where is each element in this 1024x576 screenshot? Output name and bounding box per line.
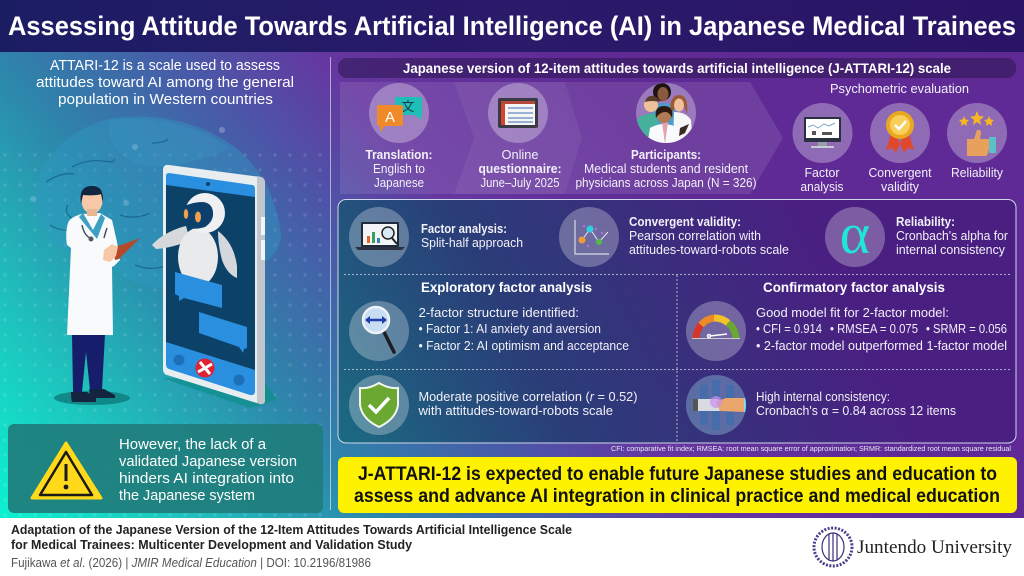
method: reliability xyxy=(825,201,1009,267)
step: factor analysis: analysis xyxy=(800,179,844,194)
footer xyxy=(0,518,1024,576)
method: convergent validity: Convergent validity: xyxy=(629,214,741,229)
heading pill: Japanese version of 12-item attitudes towards artificial intelligence (J-ATTARI-12) scale xyxy=(403,60,951,76)
intro text: population in Western countries xyxy=(58,91,273,108)
method: convergent validity xyxy=(559,207,789,267)
robot xyxy=(152,193,237,286)
method: convergent validity: Pearson correlation with xyxy=(629,228,761,243)
step: translation xyxy=(366,83,432,190)
heading: Exploratory factor analysis xyxy=(421,279,592,295)
warning text: However, the lack of a xyxy=(119,436,267,453)
citation: Fujikawa et al. (2026) | JMIR Medical Education | DOI: 10.2196/81986 xyxy=(11,555,371,570)
step: translation: Translation: xyxy=(366,147,432,162)
title band xyxy=(0,0,1024,52)
citation xyxy=(11,522,572,570)
chat bubbles xyxy=(175,272,247,353)
step: translation: Japanese xyxy=(374,175,424,190)
icon: medical team xyxy=(636,83,693,146)
step: convergent validity: validity xyxy=(881,179,919,194)
citation: for Medical Trainees: Multicenter Development and Validation Study xyxy=(11,537,413,552)
icon: warning triangle xyxy=(32,443,101,498)
step: questionnaire: questionnaire: xyxy=(478,161,562,176)
step: convergent validity xyxy=(868,103,932,194)
citation: Adaptation of the Japanese Version of the 12-Item Attitudes Towards Artificial Intelligence Scale xyxy=(11,522,572,537)
warning text: hinders AI integration into xyxy=(119,470,294,487)
step: convergent validity: Convergent xyxy=(868,165,932,180)
panel: confirmatory factor analysis: • SRMR = 0.056 xyxy=(926,321,1007,336)
panel: confirmatory factor analysis: Cronbach's α = 0.84 across 12 items xyxy=(756,403,956,418)
step: questionnaire xyxy=(478,83,562,190)
icon: gauge xyxy=(692,318,740,338)
icon: laptop and magnifier xyxy=(355,222,405,250)
panel: exploratory factor analysis: with attitudes-toward-robots scale xyxy=(417,403,613,418)
step: factor analysis: Factor xyxy=(804,165,840,180)
footnote: abbreviations: CFI: comparative fit index; RMSEA: root mean square error of approximation; SRMR: standardized root mean square residual xyxy=(611,446,1011,453)
icon: brain background xyxy=(30,116,281,289)
panel: exploratory factor analysis: Moderate positive correlation (r = 0.52) xyxy=(418,389,638,404)
intro text: ATTARI-12 is a scale used to assess xyxy=(50,57,280,74)
heading: psychometric evaluation: Psychometric evaluation xyxy=(830,81,969,96)
method: reliability: internal consistency xyxy=(896,242,1005,257)
icon: medal xyxy=(886,111,914,153)
method: factor analysis: Split-half approach xyxy=(421,235,523,250)
icon: magnifier xyxy=(363,307,394,352)
step: participants xyxy=(576,83,756,190)
panel: exploratory factor analysis: 2-factor structure identified: xyxy=(418,305,579,320)
panel: confirmatory factor analysis: • RMSEA = 0.075 xyxy=(830,321,918,336)
heading pill xyxy=(338,58,1016,78)
step: translation: English to xyxy=(373,161,425,176)
illustration: phone with robot chatbot xyxy=(152,165,277,408)
step: reliability xyxy=(947,103,1007,180)
panel: analysis results xyxy=(338,200,1016,443)
icon: tablet form xyxy=(498,98,538,128)
logo: Juntendo University xyxy=(814,528,1012,566)
panel: study flow xyxy=(338,58,1016,194)
intro text: attitudes toward AI among the general xyxy=(36,74,294,91)
step: reliability: Reliability xyxy=(951,165,1003,180)
heading: Confirmatory factor analysis xyxy=(763,279,945,295)
icon: robot and human handshake xyxy=(686,375,747,435)
panel: confirmatory factor analysis xyxy=(686,279,1007,435)
step: participants: physicians across Japan (N = 326) xyxy=(576,175,756,190)
step: factor analysis xyxy=(792,103,852,194)
callout: conclusion xyxy=(338,457,1017,513)
icon: cross button xyxy=(196,358,214,378)
panel: confirmatory factor analysis: • 2-factor model outperformed 1-factor model xyxy=(756,338,1007,353)
step: participants: Medical students and resident xyxy=(584,161,748,176)
panel: exploratory factor analysis: • Factor 1: AI anxiety and aversion xyxy=(418,321,601,336)
panel: exploratory factor analysis xyxy=(349,279,638,435)
icon: thumbs up with stars xyxy=(959,111,996,156)
panel: warning xyxy=(8,424,323,513)
logo: Juntendo University: Juntendo University xyxy=(857,537,1012,558)
icon: scatter plot xyxy=(575,220,609,254)
method: convergent validity: attitudes-toward-robots scale xyxy=(629,242,789,257)
chevron arrows xyxy=(340,82,783,194)
panel: confirmatory factor analysis: High internal consistency: xyxy=(756,389,890,404)
method: reliability: Cronbach's alpha for xyxy=(896,228,1009,243)
panel: confirmatory factor analysis: • CFI = 0.914 xyxy=(756,321,822,336)
method: factor analysis: Factor analysis: xyxy=(421,221,507,236)
panel: confirmatory factor analysis: Good model fit for 2-factor model: xyxy=(756,305,949,320)
icon: monitor xyxy=(804,117,841,148)
step: questionnaire: June–July 2025 xyxy=(480,175,560,190)
intro text xyxy=(36,57,294,108)
warning text: validated Japanese version xyxy=(119,453,297,470)
illustration: doctor xyxy=(54,186,140,405)
icon: translate bubbles: 文 xyxy=(401,99,415,114)
step: participants: Participants: xyxy=(631,147,701,162)
icon: shield check xyxy=(360,383,398,427)
panel: exploratory factor analysis: • Factor 2: AI optimism and acceptance xyxy=(418,338,629,353)
icon: translate bubbles: A xyxy=(385,109,395,126)
method: factor analysis xyxy=(349,207,523,267)
step: questionnaire: Online xyxy=(502,147,538,162)
warning text xyxy=(119,436,297,504)
warning text: the Japanese system xyxy=(119,487,255,504)
icon: alpha: α xyxy=(840,201,870,266)
panel: background on ATTARI-12 xyxy=(8,57,323,513)
icon: translate bubbles xyxy=(377,97,422,132)
method: reliability: Reliability: xyxy=(896,214,955,229)
